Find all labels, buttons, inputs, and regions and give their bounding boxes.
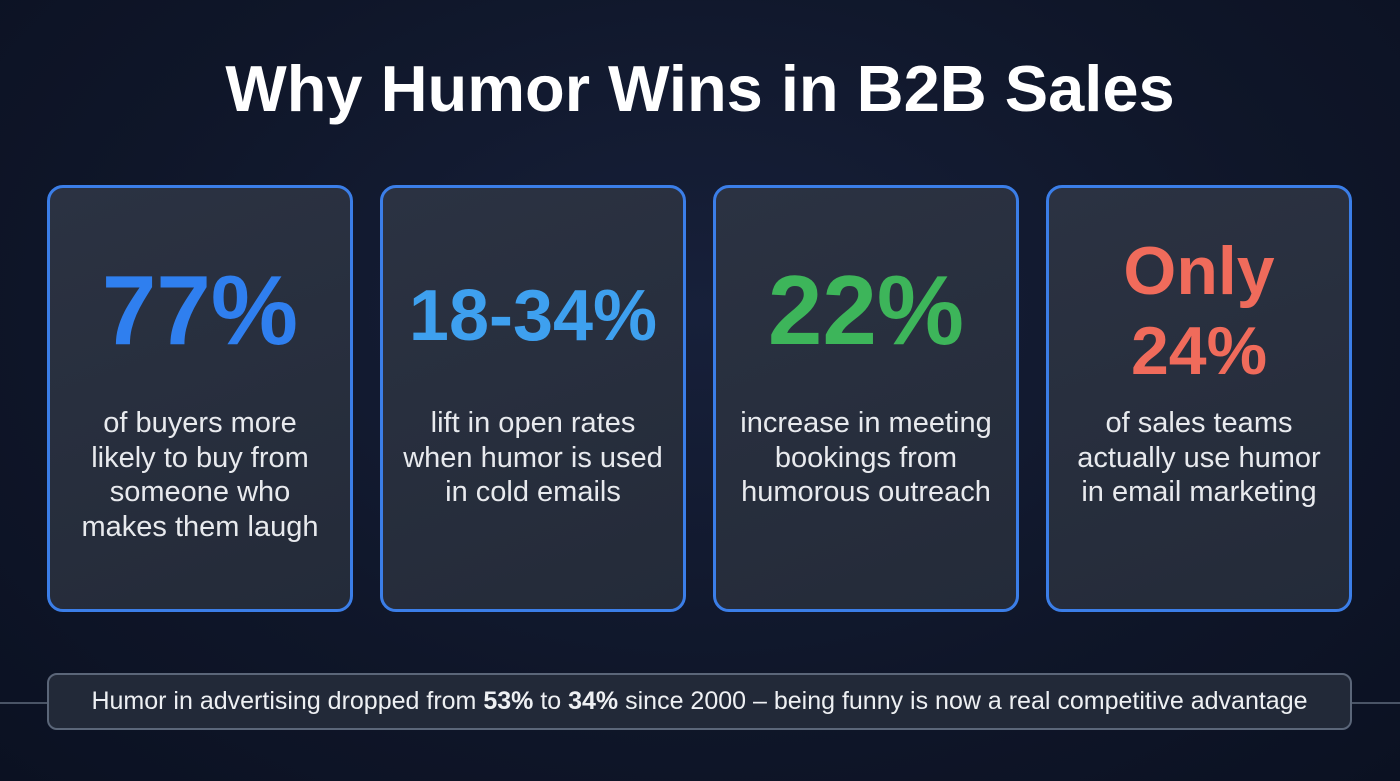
description 4: of sales teams — [1106, 407, 1292, 439]
description 1: of buyers more — [103, 407, 297, 439]
description 3: increase in meeting — [740, 407, 992, 439]
stat 22%: 22% — [768, 255, 964, 365]
callout banner — [47, 673, 1352, 730]
description 3: humorous outreach — [741, 476, 991, 508]
stat 18-34%: 18-34% — [409, 276, 657, 356]
description 1: makes them laugh — [82, 510, 318, 542]
description 3: bookings from — [775, 442, 957, 474]
callout banner: Humor in advertising dropped from 53% to 34% since 2000 – being funny is now a real competitive advantage — [91, 687, 1308, 715]
description 3 — [740, 407, 992, 508]
description 2 — [403, 407, 663, 508]
description 4: in email marketing — [1081, 476, 1317, 508]
panel: 18-34% — [380, 185, 686, 612]
title: Why Humor Wins in B2B Sales — [225, 52, 1175, 125]
description 1: someone who — [110, 476, 290, 508]
stat only 24% — [1123, 233, 1275, 389]
description 2: lift in open rates — [431, 407, 635, 439]
description 1: likely to buy from — [91, 442, 309, 474]
panel: 22% — [713, 185, 1019, 612]
description 2: in cold emails — [445, 476, 621, 508]
panel: 77% — [47, 185, 353, 612]
stat only 24%: Only — [1123, 233, 1275, 309]
description 4 — [1077, 407, 1321, 508]
description 1 — [82, 407, 318, 542]
description 4: actually use humor — [1077, 442, 1321, 474]
stat 77%: 77% — [102, 255, 298, 365]
stat only 24%: 24% — [1131, 313, 1267, 389]
description 2: when humor is used — [403, 442, 663, 474]
panel: only 24% — [1046, 185, 1352, 612]
